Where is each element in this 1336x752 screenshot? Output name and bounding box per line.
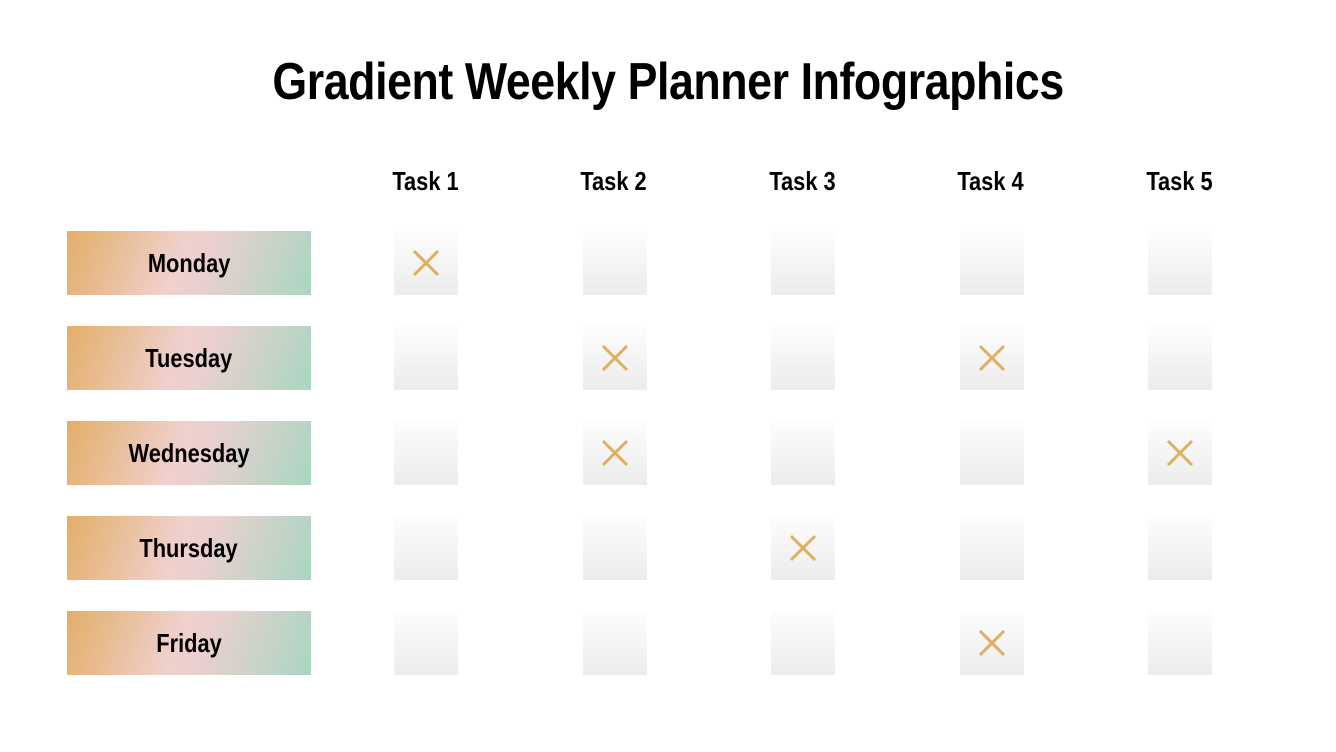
cell bbox=[1148, 231, 1212, 295]
cell bbox=[960, 516, 1024, 580]
cell: Tuesday Task 2 checked bbox=[583, 326, 647, 390]
day: Thursday bbox=[67, 516, 311, 580]
cell bbox=[960, 231, 1024, 295]
cell bbox=[771, 421, 835, 485]
day: Tuesday: Tuesday bbox=[146, 343, 232, 373]
day: Tuesday bbox=[67, 326, 311, 390]
day: Monday bbox=[67, 231, 311, 295]
day: Friday bbox=[67, 611, 311, 675]
cell: Thursday Task 3 checked bbox=[771, 516, 835, 580]
cell bbox=[771, 231, 835, 295]
cell: Monday Task 1 checked bbox=[394, 231, 458, 295]
cell bbox=[394, 611, 458, 675]
cell bbox=[394, 326, 458, 390]
cell: Wednesday Task 2 checked bbox=[583, 421, 647, 485]
cell: Wednesday Task 5 checked bbox=[1148, 421, 1212, 485]
title: Gradient Weekly Planner Infographics bbox=[272, 53, 1064, 111]
cell bbox=[394, 516, 458, 580]
cell bbox=[583, 516, 647, 580]
cell bbox=[394, 421, 458, 485]
cell bbox=[1148, 326, 1212, 390]
header: Task 1: Task 1 bbox=[393, 166, 459, 196]
header: Task 3: Task 3 bbox=[770, 166, 836, 196]
cell bbox=[771, 326, 835, 390]
cell bbox=[1148, 516, 1212, 580]
cell: Friday Task 4 checked bbox=[960, 611, 1024, 675]
day: Wednesday bbox=[67, 421, 311, 485]
cell: Tuesday Task 4 checked bbox=[960, 326, 1024, 390]
cell bbox=[583, 611, 647, 675]
header: Task 2: Task 2 bbox=[581, 166, 647, 196]
cell bbox=[771, 611, 835, 675]
day: Monday: Monday bbox=[148, 248, 230, 278]
cell bbox=[1148, 611, 1212, 675]
header: Task 4: Task 4 bbox=[958, 166, 1024, 196]
day: Friday: Friday bbox=[156, 628, 222, 658]
day: Wednesday: Wednesday bbox=[129, 438, 249, 468]
day: Thursday: Thursday bbox=[140, 533, 238, 563]
cell bbox=[583, 231, 647, 295]
cell bbox=[960, 421, 1024, 485]
header: Task 5: Task 5 bbox=[1147, 166, 1213, 196]
